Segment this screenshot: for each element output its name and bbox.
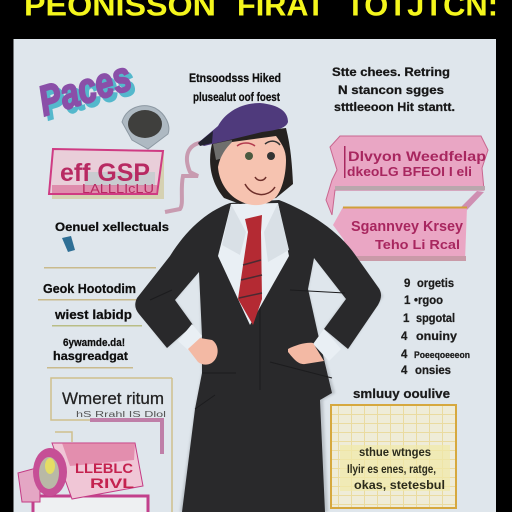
text block: top centre: plusealut oof foest — [193, 90, 280, 104]
text block: top centre: Etnsoodsss Hiked — [189, 71, 281, 85]
text block: top centre — [189, 71, 281, 104]
panel: right pink callout top: dkeoLG BFEOI I eli — [347, 164, 472, 179]
left list: Geok Hootodim — [43, 281, 136, 296]
panel: gold grid card: Ilyir es enes, ratge, — [347, 464, 436, 476]
text: left caption: Oenuel xellectuals — [55, 222, 169, 234]
face — [218, 136, 286, 205]
left list: 6ywamde.da! — [63, 337, 125, 349]
panel: right pink callout bottom — [333, 206, 467, 261]
right numbered list: 4 — [401, 365, 408, 377]
figure shadow — [135, 250, 383, 512]
panel: left pink sign: eff GSP — [60, 159, 150, 187]
right cuff and hand — [313, 329, 341, 361]
logo: purple script: Paces — [33, 52, 137, 125]
panel: right pink callout bottom: Teho Li Rcal — [375, 237, 460, 252]
grey hair patch — [213, 140, 232, 160]
text block: top right: Stte chees. Retring — [332, 65, 450, 79]
shirt — [218, 203, 289, 325]
panel: framed heading box — [51, 378, 172, 512]
panel: gold grid card: okas, stetesbul — [354, 480, 445, 492]
panel: framed heading box: hS Rrahl IS Dlol — [76, 410, 166, 419]
arrow: pink connector — [165, 142, 204, 212]
text block: top right: stttleeoon Hit stantt. — [334, 100, 455, 114]
right numbered list: •rgoo — [414, 295, 443, 307]
hair — [210, 128, 293, 204]
text block: top right: N stancon sgges — [338, 83, 444, 97]
panel: left pink sign: LALLLIcLU — [82, 181, 154, 196]
suit detail lines — [150, 290, 345, 409]
suit — [135, 200, 381, 512]
left list: wiest labidp — [54, 307, 132, 322]
right numbered list: 4 — [401, 349, 408, 361]
panel: left pink sign — [49, 149, 164, 199]
icon: grey rock — [122, 106, 169, 149]
icon: blue tag — [62, 236, 75, 252]
logo: purple script: Paces — [37, 56, 141, 129]
facial features — [237, 141, 280, 195]
left cuff and hand — [178, 324, 202, 350]
right numbered list: orgetis — [417, 278, 454, 290]
tie stripes — [239, 260, 262, 298]
panel: right pink callout top: Dlvyon Weedfelap — [348, 148, 486, 164]
hat brim — [198, 131, 213, 146]
left list — [38, 267, 156, 368]
panel: right pink callout bottom: Sgannvey Krsey — [351, 218, 464, 235]
right numbered list: 1 — [404, 295, 411, 307]
right numbered list: spgotal — [416, 313, 455, 325]
right numbered list: onsies — [415, 365, 451, 377]
text block: top right — [332, 65, 455, 114]
right numbered list: 4 — [401, 331, 408, 343]
title — [24, 0, 498, 22]
panel: right pink callout top — [326, 136, 488, 215]
right numbered list — [401, 278, 470, 377]
right numbered list: Poeeqoeeeon — [414, 350, 470, 360]
illustration: pink ticket: LLEBLC — [75, 460, 133, 476]
right numbered list: 1 — [403, 313, 410, 325]
text: gold panel heading: smluuy ooulive — [353, 387, 450, 401]
illustration: pink ticket: RIVL — [90, 475, 135, 491]
shirt shading — [222, 203, 289, 262]
panel: framed heading box: Wmeret ritum — [62, 389, 164, 408]
right numbered list: onuiny — [416, 331, 458, 343]
right numbered list: 9 — [404, 278, 410, 290]
figure: man in black suit — [135, 103, 383, 512]
panel: gold grid card — [331, 405, 456, 508]
tie — [238, 215, 262, 325]
illustration: pink ticket — [18, 443, 148, 512]
left list: hasgreadgat — [53, 349, 128, 363]
panel: gold grid card: sthue wtnges — [359, 447, 431, 459]
hat — [198, 103, 288, 146]
